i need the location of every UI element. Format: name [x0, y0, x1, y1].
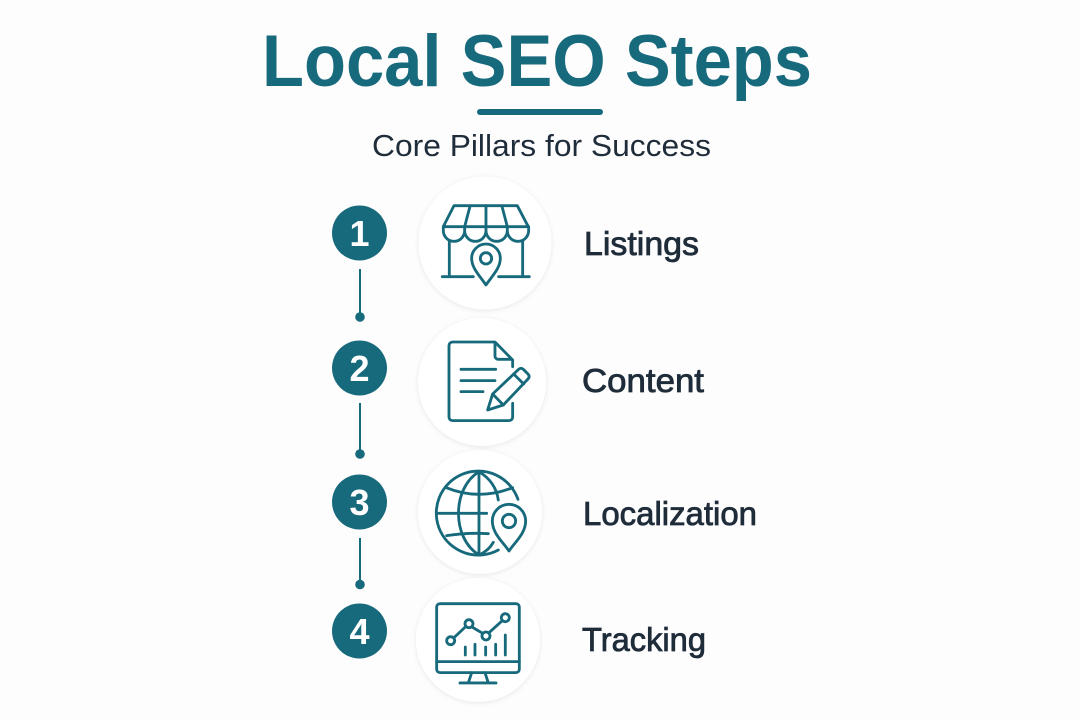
- number badge 3: [332, 474, 387, 530]
- connector 2 to 3: [355, 403, 365, 459]
- connector 1 to 2: [355, 269, 365, 322]
- number badge 1: [332, 206, 387, 260]
- step 1: listings: [332, 176, 699, 322]
- icon circle 3: [418, 450, 542, 574]
- step 2: content: [332, 318, 704, 459]
- number badge 1: 1: [349, 213, 370, 254]
- number badge 4: [332, 604, 387, 658]
- number badge 2: 2: [349, 348, 370, 389]
- title: Local SEO Steps: [262, 21, 812, 102]
- icon circle 1: [418, 176, 552, 310]
- icon: document with pencil: [449, 342, 529, 421]
- number badge 2: [332, 340, 387, 396]
- step 4: tracking: [332, 578, 706, 702]
- icon circle 4: [416, 578, 540, 702]
- connector 3 to 4: [355, 538, 365, 589]
- icon: storefront with map pin: [442, 206, 529, 285]
- subtitle: Core Pillars for Success: [372, 128, 711, 163]
- title underline: [477, 109, 603, 115]
- label: Content: Content: [582, 362, 704, 399]
- label: Localization: Localization: [583, 495, 757, 532]
- label: Tracking: Tracking: [582, 621, 706, 658]
- icon: monitor with line chart: [437, 604, 519, 683]
- icon circle 2: [418, 318, 546, 446]
- icon: globe with map pin: [436, 471, 526, 555]
- step 3: localization: [332, 450, 757, 589]
- label: Listings: Listings: [584, 225, 699, 262]
- number badge 4: 4: [349, 611, 370, 652]
- number badge 3: 3: [349, 482, 370, 523]
